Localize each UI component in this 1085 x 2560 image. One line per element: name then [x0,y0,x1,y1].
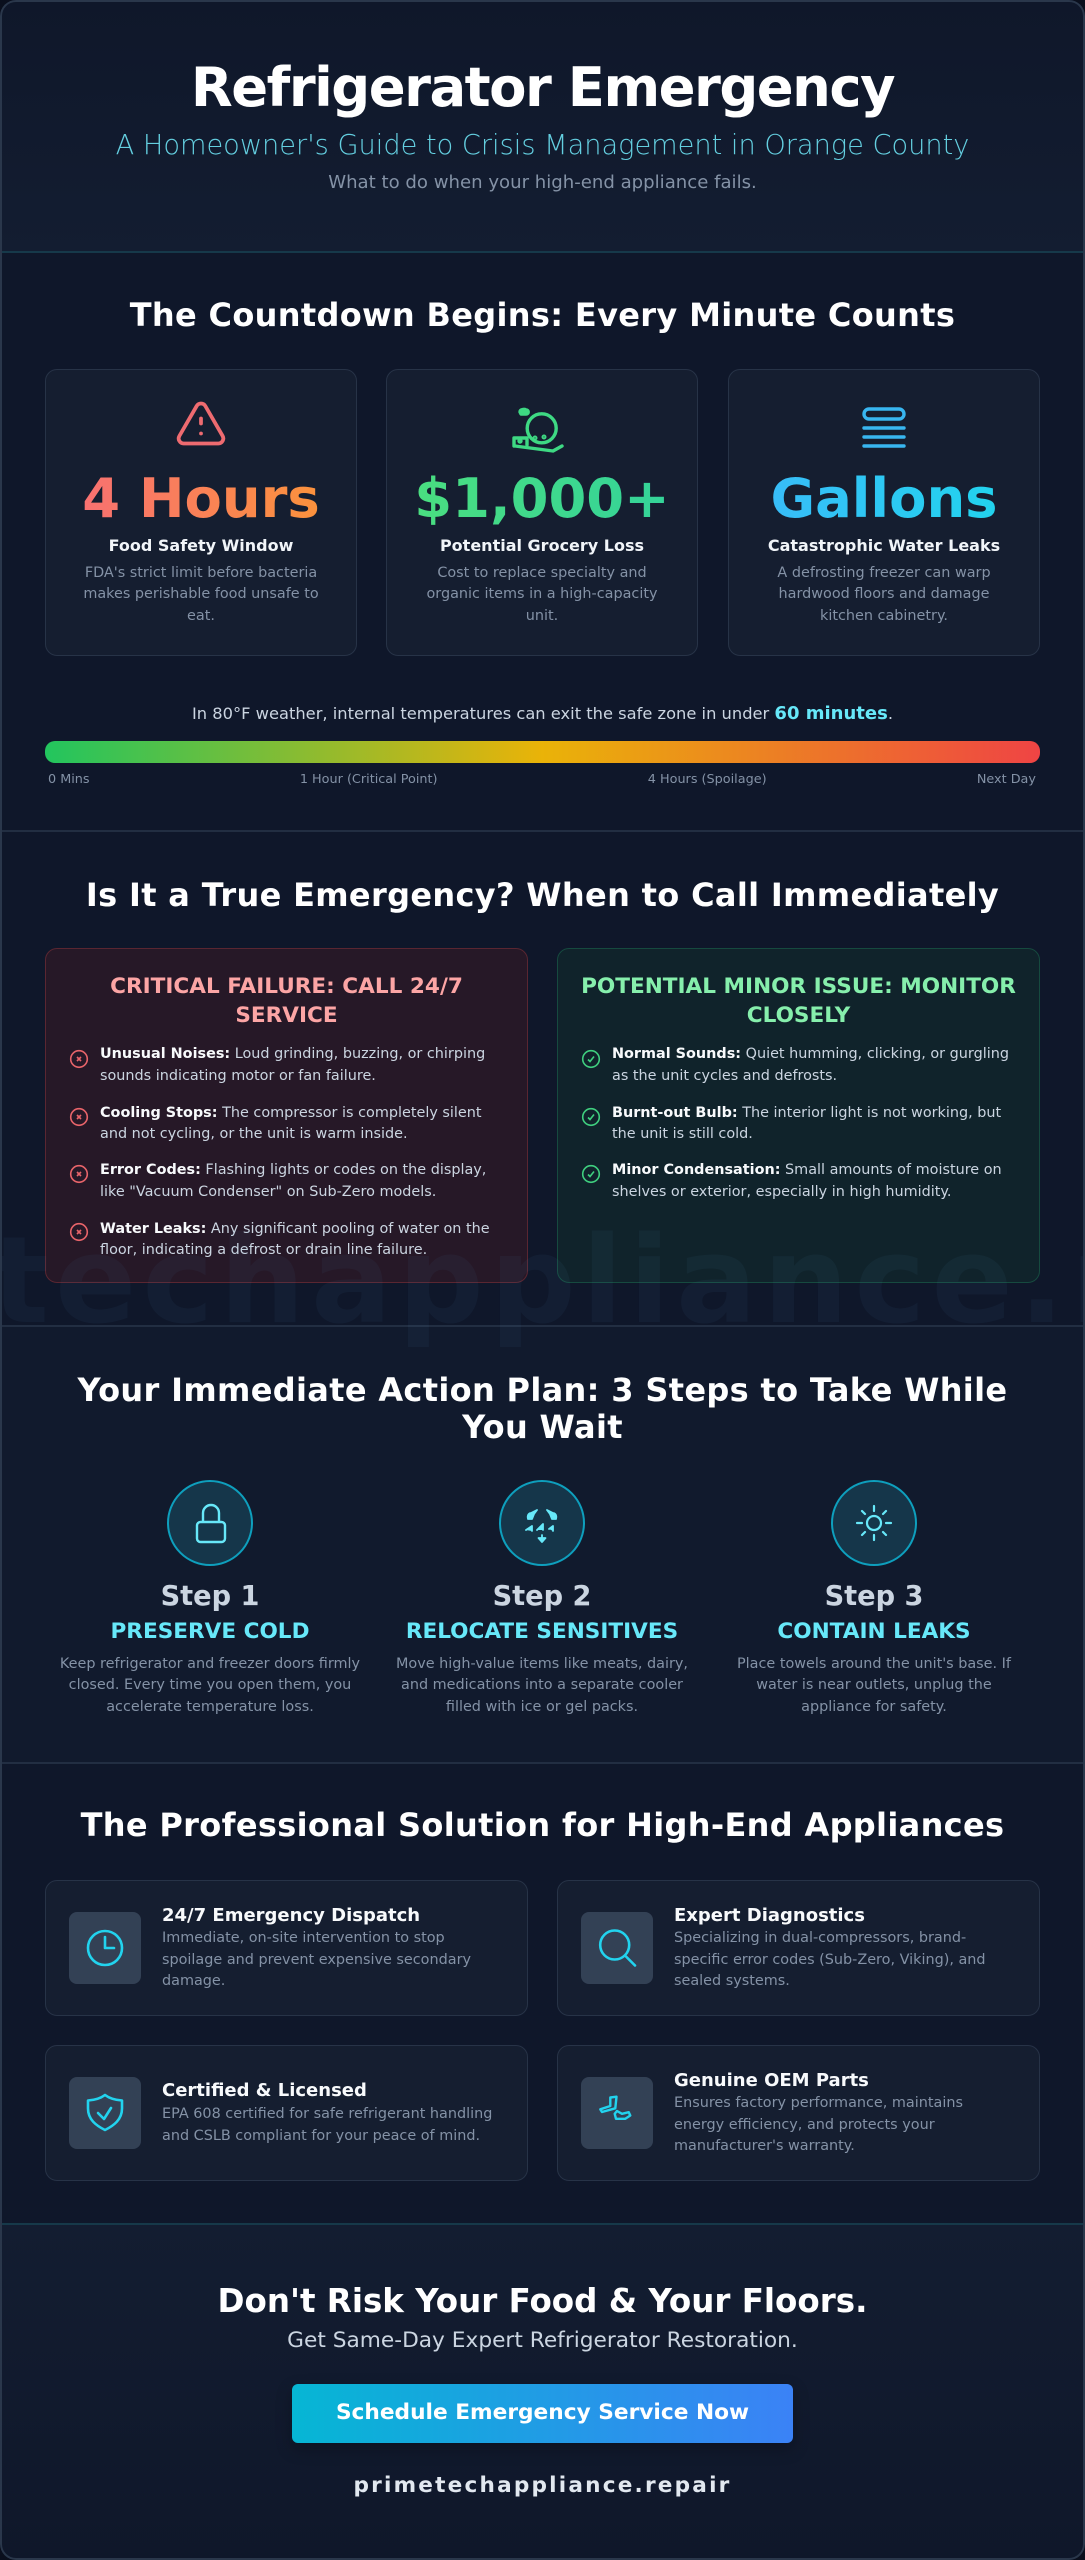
feature card: dispatch [45,1880,528,2016]
minor heading: POTENTIAL MINOR ISSUE: MONITOR [581,974,1016,998]
critical item: cooling stops: Cooling Stops: The compressor is completely silent [100,1104,482,1120]
stat description: makes perishable food unsafe to [83,586,319,602]
heading: professional solution: The Professional Solution for High-End Appliances [81,1806,1004,1844]
stat description [83,564,319,624]
timeline labels: 4 Hours (Spoilage) [648,772,767,787]
step text: and medications into a separate cooler [401,1677,683,1693]
feature title: Genuine OEM Parts [674,2070,869,2091]
stat label: Food Safety Window [109,536,293,554]
icon: lock [167,1480,253,1566]
stat card: grocery loss [386,369,698,656]
critical heading: SERVICE [235,1002,338,1028]
timeline note: In 80°F weather, internal temperatures can exit the safe zone in under 60 minutes. [192,703,893,724]
step text [60,1656,360,1715]
stat card: food safety window [45,369,357,656]
icon: check circle [582,1050,600,1068]
step text: accelerate temperature loss. [106,1699,314,1715]
minor item: normal sounds: Normal Sounds: Quiet humming, clicking, or gurgling [612,1046,1009,1062]
feature text [674,1930,986,1989]
critical item: unusual noises [100,1046,485,1084]
stat description: Cost to replace specialty and [437,564,647,580]
step title: RELOCATE SENSITIVES [406,1619,678,1644]
critical item: water leaks: Water Leaks: Any significant pooling of water on the [100,1220,490,1236]
icon: money [512,408,564,453]
feature text: manufacturer's warranty. [674,2138,855,2154]
icon: x circle [70,1050,88,1068]
heading: action plan: You Wait [462,1408,623,1446]
critical item: unusual noises: sounds indicating motor or fan failure. [100,1068,376,1084]
panel: minor issue [557,948,1040,1283]
stat label: Catastrophic Water Leaks [768,536,1000,554]
minor item: burnt-out bulb: the unit is still cold. [612,1126,753,1142]
icon: sun [831,1480,917,1566]
icon: shield [69,2077,141,2149]
step text: Move high-value items like meats, dairy, [396,1656,688,1672]
heading: countdown: The Countdown Begins: Every Minute Counts [130,296,955,334]
stat description [777,564,991,624]
critical item: cooling stops: and not cycling, or the unit is warm inside. [100,1126,408,1142]
minor item: normal sounds [612,1046,1009,1084]
feature text: Specializing in dual-compressors, brand- [674,1930,966,1946]
stat label: Potential Grocery Loss [440,536,644,554]
timeline labels: Next Day [977,772,1036,787]
step text: Keep refrigerator and freezer doors firmly [60,1656,360,1672]
feature card: OEM parts [557,2045,1040,2181]
step text: closed. Every time you open them, you [69,1677,351,1693]
critical heading [110,974,463,1028]
step text: filled with ice or gel packs. [446,1699,638,1715]
feature text: and CSLB compliant for your peace of mind. [162,2128,480,2144]
stat description: A defrosting freezer can warp [777,564,991,580]
icon: magnifier [581,1912,653,1984]
feature text [162,1930,471,1989]
feature text: damage. [162,1973,225,1989]
step 3 [737,1480,1012,1715]
panel: true emergency [0,832,1085,1327]
critical item: error codes [100,1162,486,1200]
minor item: condensation: shelves or exterior, especially in high humidity. [612,1184,951,1200]
critical item: error codes: like "Vacuum Condenser" on Sub-Zero models. [100,1184,436,1200]
icon: parts [581,2077,653,2149]
feature text: specific error codes (Sub-Zero, Viking), and [674,1952,986,1968]
icon: water layers [862,407,906,448]
critical heading: CRITICAL FAILURE: CALL 24/7 [110,974,463,998]
stat card: water leaks [728,369,1040,656]
panel: call to action [0,2225,1085,2560]
icon: check circle [582,1164,600,1184]
minor heading: CLOSELY [747,1002,850,1028]
stat description: organic items in a high-capacity [426,586,658,602]
minor item: condensation [612,1162,1002,1200]
timeline bar [45,740,1040,763]
stat: gallons: Gallons [770,466,998,530]
step number: Step 1 [161,1581,259,1612]
minor heading [581,974,1016,1028]
cta heading: Don't Risk Your Food & Your Floors. [218,2282,867,2320]
feature text [674,2093,963,2158]
stat description: kitchen cabinetry. [820,608,948,624]
stat description: FDA's strict limit before bacteria [85,564,317,580]
step title: PRESERVE COLD [110,1619,310,1644]
feature text: Immediate, on-site intervention to stop [162,1930,445,1946]
panel: countdown [0,253,1085,832]
critical item: unusual noises: Unusual Noises: Loud grinding, buzzing, or chirping [100,1046,485,1062]
panel: action plan [0,1327,1085,1764]
cta button [292,2384,793,2443]
stat description [426,564,658,624]
timeline labels: 1 Hour (Critical Point) [300,772,438,787]
icon: clock [69,1912,141,1984]
step text: water is near outlets, unplug the [756,1677,992,1693]
feature text: sealed systems. [674,1973,790,1989]
minor item: burnt-out bulb [612,1104,1001,1142]
heading: action plan [77,1370,1007,1446]
step text: appliance for safety. [801,1699,947,1715]
title: Refrigerator Emergency [191,56,894,119]
feature card: certified [45,2045,528,2181]
step number: Step 3 [825,1581,923,1612]
critical item: error codes: Error Codes: Flashing lights or codes on the display, [100,1162,486,1178]
critical item: water leaks [100,1220,490,1258]
heading: action plan: Your Immediate Action Plan: 3 Steps to Take While [78,1370,1007,1408]
stat: dollars: $1,000+ [414,466,670,530]
icon: x circle [70,1222,88,1242]
icon: check circle [582,1108,600,1126]
panel: critical failure [45,948,528,1283]
step text: Place towels around the unit's base. If [737,1656,1011,1672]
feature text: EPA 608 certified for safe refrigerant handling [162,2106,492,2122]
panel: professional solution [0,1764,1085,2225]
header panel [0,0,1085,253]
heading: true emergency: Is It a True Emergency? When to Call Immediately [86,876,999,914]
stat description: unit. [526,608,558,624]
stat description: eat. [187,608,215,624]
step title: CONTAIN LEAKS [777,1619,971,1644]
feature title: Certified & Licensed [162,2080,367,2101]
feature text: spoilage and prevent expensive secondary [162,1952,471,1968]
step text [396,1656,688,1715]
step text [737,1656,1012,1715]
icon: warning triangle [176,402,226,446]
feature title: 24/7 Emergency Dispatch [162,1905,420,1926]
website url: primetechappliance.repair [353,2473,732,2498]
stat description: hardwood floors and damage [779,586,989,602]
feature card: diagnostics [557,1880,1040,2016]
minor item: burnt-out bulb: Burnt-out Bulb: The interior light is not working, but [612,1104,1001,1120]
feature text: Ensures factory performance, maintains [674,2095,963,2111]
feature text [162,2106,492,2144]
step number: Step 2 [493,1581,591,1612]
critical item: water leaks: floor, indicating a defrost or drain line failure. [100,1242,427,1258]
stat: 4 hours: 4 Hours [82,466,320,530]
feature title: Expert Diagnostics [674,1905,865,1926]
step 2 [396,1480,688,1715]
feature text: energy efficiency, and protects your [674,2117,935,2133]
minor item: condensation: Minor Condensation: Small amounts of moisture on [612,1162,1002,1178]
step 1 [60,1480,360,1715]
cta subheading: Get Same-Day Expert Refrigerator Restoration. [287,2328,798,2353]
minor item: normal sounds: as the unit cycles and defrosts. [612,1068,837,1084]
tagline: What to do when your high-end appliance fails. [328,172,757,192]
subtitle: A Homeowner's Guide to Crisis Management in Orange County [116,130,969,160]
icon: x circle [70,1108,88,1126]
timeline labels [48,772,1036,787]
critical item: cooling stops [100,1104,482,1142]
cta button: Schedule Emergency Service Now [336,2400,749,2425]
icon: relocate [499,1480,585,1566]
icon: x circle [70,1164,88,1184]
timeline labels: 0 Mins [48,772,90,787]
